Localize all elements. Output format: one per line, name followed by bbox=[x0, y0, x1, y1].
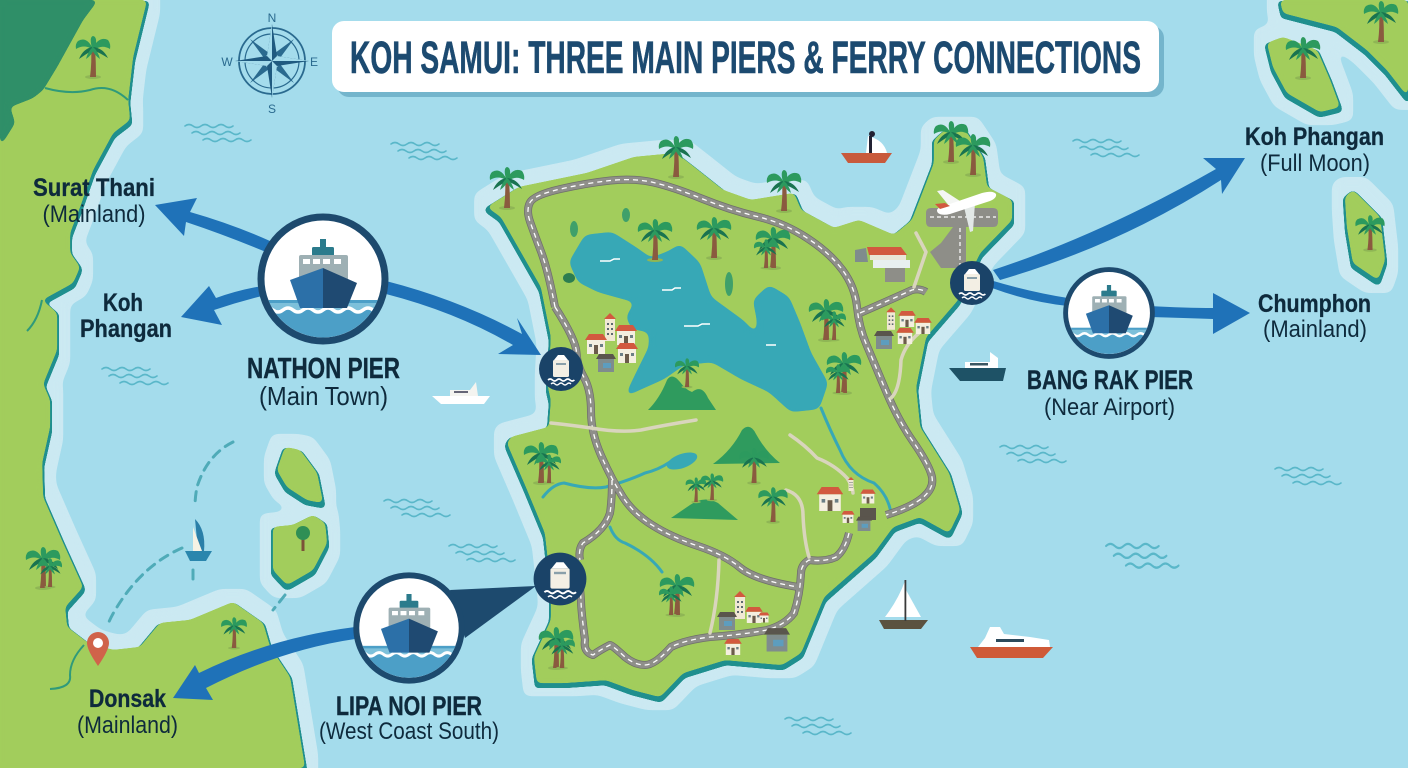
label: Koh Phangan east: Koh Phangan bbox=[1245, 123, 1384, 151]
arrow: Nathon to west pier bbox=[386, 281, 541, 355]
compass rose: W bbox=[221, 55, 233, 69]
label: Chumphon bbox=[1258, 290, 1371, 343]
yacht in western bay bbox=[185, 519, 212, 561]
sea waves bbox=[102, 124, 1341, 734]
pier badges on island bbox=[534, 261, 994, 605]
label: Nathon Pier: (Main Town) bbox=[259, 381, 388, 411]
road network bbox=[528, 180, 932, 665]
icon: Nathon ferry bbox=[261, 217, 385, 341]
label: Chumphon: Chumphon bbox=[1258, 290, 1371, 318]
dark forest area bbox=[0, 0, 98, 147]
arrow: Bang Rak to Koh Phangan bbox=[993, 158, 1245, 280]
label: Surat Thani bbox=[33, 174, 155, 228]
lake bbox=[569, 232, 828, 412]
label: Donsak: Donsak bbox=[89, 685, 166, 713]
arrow: Nathon to Koh Phangan bbox=[181, 286, 262, 325]
dark wedge: Lipa Noi callout bbox=[450, 586, 536, 638]
arrow: Bang Rak to Chumphon bbox=[1150, 293, 1250, 334]
secondary roads bbox=[551, 233, 926, 633]
hills bbox=[648, 376, 780, 520]
label: Bang Rak Pier: (Near Airport) bbox=[1044, 394, 1175, 421]
lake ripples and bushes bbox=[563, 208, 776, 345]
compass rose: E bbox=[310, 55, 318, 69]
label: Donsak bbox=[77, 685, 178, 739]
airport bbox=[855, 190, 998, 282]
label: Koh Phangan west: Phangan bbox=[80, 315, 172, 343]
compass rose: S bbox=[268, 102, 276, 116]
western mainland bbox=[0, 0, 305, 768]
red sailboat north bbox=[841, 131, 892, 163]
label: Lipa Noi Pier: (West Coast South) bbox=[319, 718, 499, 745]
label: Koh Phangan west: Koh bbox=[103, 289, 143, 317]
badge: Lipa Noi bbox=[534, 553, 586, 605]
runway bbox=[926, 208, 998, 268]
icon: Lipa Noi ferry bbox=[356, 575, 462, 681]
label: Koh Phangan west bbox=[80, 289, 172, 343]
label: Lipa Noi Pier bbox=[319, 691, 499, 745]
small west islet south bbox=[273, 515, 327, 585]
arrow: Nathon to Surat Thani bbox=[155, 198, 270, 252]
arrows bbox=[155, 158, 1250, 700]
label: Donsak: (Mainland) bbox=[77, 712, 178, 739]
small west islet north bbox=[277, 447, 323, 503]
label: Surat Thani: (Mainland) bbox=[42, 201, 146, 228]
ferry icons bbox=[261, 217, 1152, 681]
red ferry south bbox=[970, 627, 1053, 658]
location pin: Donsak bbox=[87, 632, 109, 666]
boats bbox=[185, 131, 1053, 658]
arrow: Lipa Noi to Donsak bbox=[173, 627, 355, 700]
badge: Nathon bbox=[539, 347, 583, 391]
northeast mainland bbox=[1280, 0, 1408, 97]
terminal bbox=[855, 248, 868, 262]
label: Chumphon: (Mainland) bbox=[1263, 316, 1367, 343]
Koh Samui island bbox=[487, 130, 1012, 697]
village buildings bbox=[585, 307, 932, 655]
icon: Bang Rak ferry bbox=[1066, 270, 1152, 356]
northeast islet bbox=[1267, 37, 1340, 112]
east islet bbox=[1345, 190, 1385, 280]
label: Bang Rak Pier: BANG RAK PIER bbox=[1027, 365, 1193, 395]
title banner bbox=[332, 21, 1164, 97]
arrow: Bang Rak pier to badge bbox=[990, 280, 1068, 306]
label: Nathon Pier: NATHON PIER bbox=[247, 353, 400, 385]
label: Koh Phangan east bbox=[1245, 123, 1384, 177]
round tree on islet bbox=[296, 526, 310, 551]
navy boat east bbox=[949, 352, 1006, 381]
label: Bang Rak Pier bbox=[1027, 365, 1193, 421]
badge: Bang Rak bbox=[950, 261, 994, 305]
label: Koh Phangan east: (Full Moon) bbox=[1260, 150, 1370, 177]
dashed routes bbox=[107, 442, 285, 627]
label: Nathon Pier bbox=[247, 353, 400, 411]
label: Lipa Noi Pier: LIPA NOI PIER bbox=[336, 691, 482, 721]
rivers and pond bbox=[543, 408, 891, 572]
label: Surat Thani: Surat Thani bbox=[33, 174, 155, 202]
sailboat south bbox=[879, 580, 928, 629]
plane bbox=[935, 190, 996, 232]
mainland river bbox=[27, 88, 128, 689]
compass rose: N bbox=[268, 11, 276, 25]
compass rose bbox=[221, 11, 318, 116]
white boat west bbox=[432, 382, 490, 404]
